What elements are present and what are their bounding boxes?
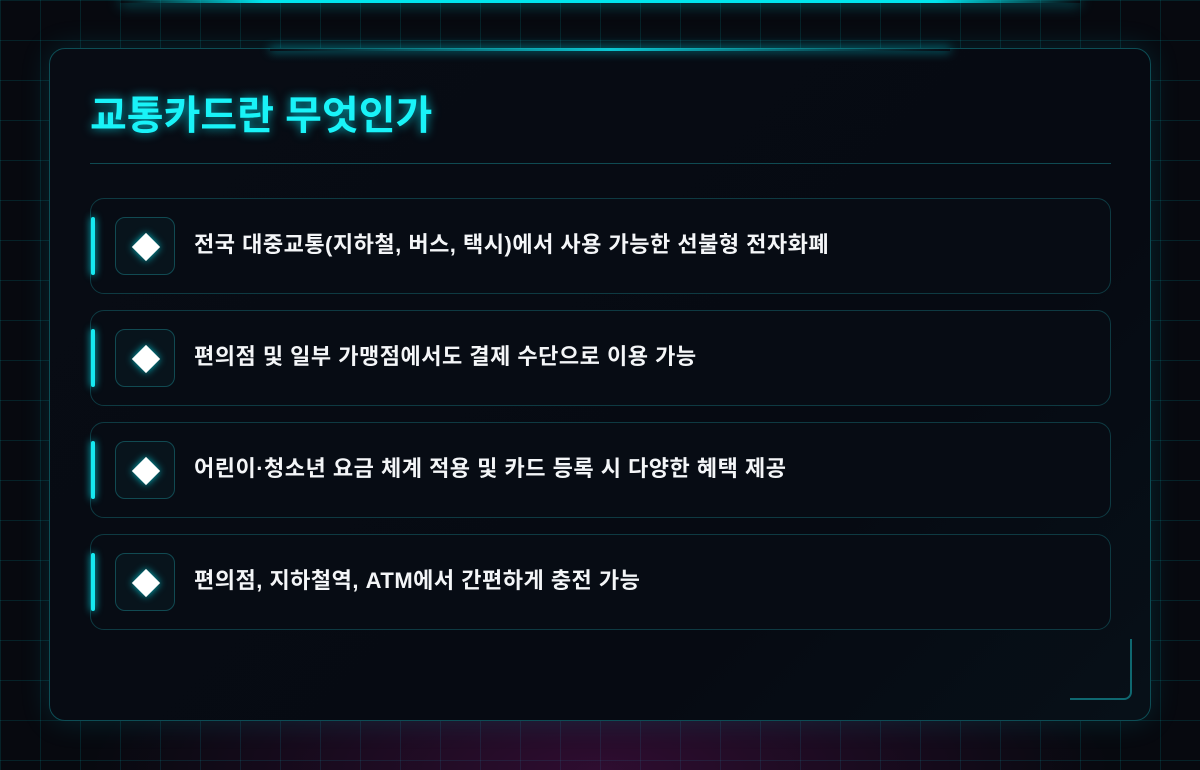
title: 교통카드란 무엇인가 (90, 94, 432, 138)
icon: diamond (115, 441, 175, 499)
corner decoration (1070, 639, 1132, 700)
item 1 (90, 198, 1111, 294)
item 4 (90, 534, 1111, 630)
item 2 (90, 310, 1111, 406)
text: 편의점, 지하철역, ATM에서 간편하게 충전 가능 (194, 568, 640, 593)
text: 편의점 및 일부 가맹점에서도 결제 수단으로 이용 가능 (194, 344, 697, 369)
icon: diamond (115, 553, 175, 611)
text: 어린이·청소년 요금 체계 적용 및 카드 등록 시 다양한 혜택 제공 (194, 456, 786, 481)
item 3 (90, 422, 1111, 518)
icon: diamond (115, 329, 175, 387)
icon: diamond (115, 217, 175, 275)
text: 전국 대중교통(지하철, 버스, 택시)에서 사용 가능한 선불형 전자화폐 (194, 232, 829, 257)
